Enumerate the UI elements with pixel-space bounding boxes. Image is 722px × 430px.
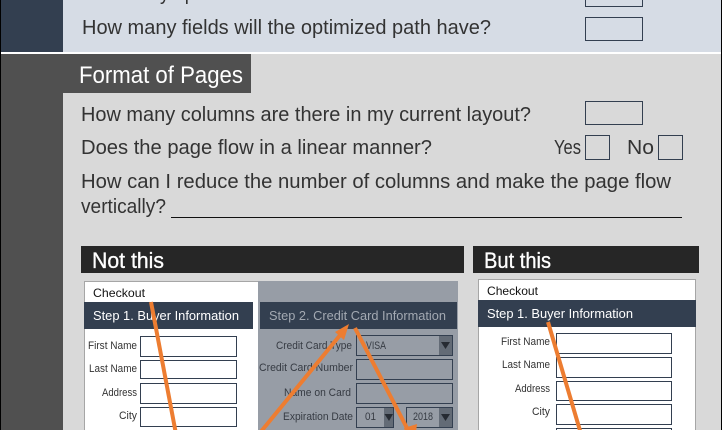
form column: credit card information, dimmed: Expiration Date bbox=[283, 411, 353, 423]
form column: buyer information bbox=[84, 286, 253, 426]
panel: But this single-column form: Step 1. Buyer Information bbox=[487, 307, 633, 321]
form column: buyer information: Checkout bbox=[93, 286, 146, 300]
panel: But this single-column form: Last Name bbox=[502, 359, 550, 371]
question: reducing columns with answer line: How can I reduce the number of columns and make the page flow bbox=[81, 171, 672, 193]
form column: buyer information: Address bbox=[102, 387, 137, 399]
question: reducing columns with answer line bbox=[81, 171, 682, 218]
panel: But this single-column form: Checkout bbox=[487, 284, 539, 298]
arrow: straight down through single column bbox=[548, 322, 581, 430]
form column: credit card information, dimmed: Step 2. Credit Card Information bbox=[269, 309, 446, 323]
question: columns in layout: How many columns are there in my current layout? bbox=[81, 104, 531, 126]
panel: But this single-column form: Address bbox=[515, 383, 550, 395]
form column: credit card information, dimmed: Credit Card Number bbox=[259, 362, 353, 374]
heading: Not this bbox=[81, 246, 464, 273]
form column: buyer information: Last Name bbox=[89, 363, 137, 375]
form column: credit card information, dimmed: 01 bbox=[365, 411, 376, 423]
arrow: down through credit card column bbox=[355, 328, 417, 430]
form column: buyer information: City bbox=[119, 410, 137, 422]
question: linear page flow with yes and no boxes: Does the page flow in a linear manner? bbox=[81, 137, 432, 159]
panel: But this single-column form bbox=[478, 280, 696, 430]
form column: buyer information: Step 1. Buyer Information bbox=[93, 309, 239, 323]
question: reducing columns with answer line: vertically? bbox=[81, 196, 166, 218]
form column: credit card information, dimmed: 2018 bbox=[413, 411, 433, 423]
heading: Format of Pages bbox=[63, 54, 251, 93]
form column: credit card information, dimmed: Name on Card bbox=[284, 387, 351, 399]
heading: Format of Pages: Format of Pages bbox=[79, 62, 243, 89]
form column: buyer information: First Name bbox=[88, 340, 137, 352]
panel: But this single-column form: First Name bbox=[501, 336, 550, 348]
heading: Not this: Not this bbox=[92, 248, 164, 273]
panel: Not this two-column form bbox=[84, 281, 458, 430]
form column: credit card information, dimmed: Credit Card Type bbox=[276, 340, 352, 352]
question: linear page flow with yes and no boxes: No bbox=[627, 137, 654, 159]
heading: But this bbox=[473, 246, 699, 273]
heading: But this: But this bbox=[484, 248, 551, 273]
form column: credit card information, dimmed: VISA bbox=[366, 340, 387, 352]
panel: optimized path section (top) bbox=[1, 0, 721, 52]
question: linear page flow with yes and no boxes bbox=[81, 136, 682, 160]
arrow: up to credit card heading bbox=[259, 324, 349, 430]
question: linear page flow with yes and no boxes: Yes bbox=[554, 137, 581, 159]
question: optimized path fields: How many fields will the optimized path have? bbox=[82, 17, 491, 39]
form column: credit card information, dimmed bbox=[258, 281, 458, 430]
arrow: down through buyer column bbox=[151, 302, 176, 430]
panel: But this single-column form: City bbox=[532, 406, 550, 418]
